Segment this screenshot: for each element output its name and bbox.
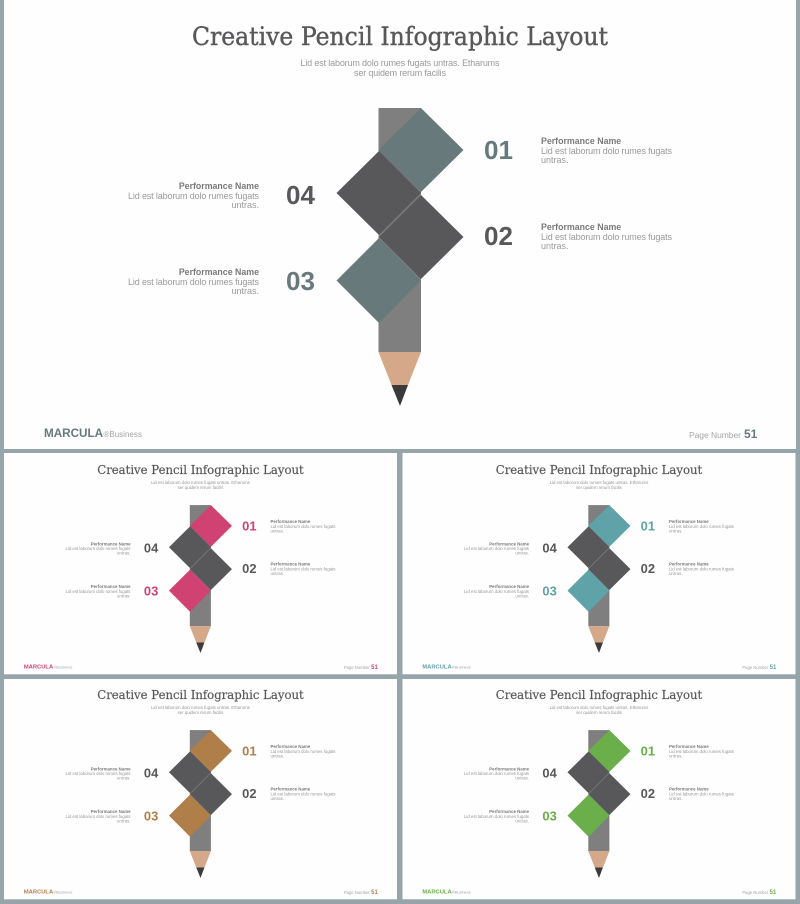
title: Creative Pencil Infographic Layout bbox=[97, 462, 304, 477]
item 03 bbox=[128, 266, 315, 296]
item 03: 03 bbox=[144, 808, 158, 823]
item 04: Lid est laborum dolo rumes fugats bbox=[464, 771, 530, 776]
brand footer: MARCULA bbox=[422, 664, 452, 670]
item 02: Performance Name bbox=[669, 562, 709, 567]
panel: green slide bbox=[402, 679, 795, 899]
pencil diagram bbox=[567, 730, 630, 878]
item 04: untras. bbox=[117, 776, 131, 781]
subtitle: Lid est laborum dolo rumes fugats untras. Etharums bbox=[151, 480, 251, 485]
page number: Page Number bbox=[344, 665, 370, 670]
item 01: Performance Name bbox=[541, 136, 621, 146]
subtitle bbox=[151, 480, 251, 490]
item 01 bbox=[242, 743, 336, 758]
subtitle: ser quidem rerum facilis bbox=[178, 710, 224, 715]
item 02: Performance Name bbox=[270, 562, 311, 567]
item 02: Lid est laborum dolo rumes fugats bbox=[270, 567, 336, 572]
item 03 bbox=[464, 583, 557, 598]
item 02 bbox=[242, 561, 336, 576]
page number: 51 bbox=[371, 665, 378, 671]
item 01 bbox=[641, 743, 735, 758]
item 01: Lid est laborum dolo rumes fugats bbox=[270, 524, 336, 529]
item 04: Performance Name bbox=[489, 541, 530, 546]
brand footer bbox=[24, 664, 72, 670]
page number: Page Number bbox=[344, 890, 370, 895]
item 02: 02 bbox=[641, 561, 655, 576]
item 01: untras. bbox=[669, 753, 683, 758]
page number: 51 bbox=[744, 427, 758, 441]
item 02 bbox=[641, 786, 735, 801]
subtitle: ser quidem rerum facilis bbox=[576, 710, 623, 715]
item 04: untras. bbox=[231, 200, 259, 210]
item 04: 04 bbox=[542, 766, 558, 781]
item 04: Performance Name bbox=[91, 766, 131, 771]
item 04 bbox=[128, 180, 315, 210]
item 02: 02 bbox=[484, 221, 513, 251]
item 02: Lid est laborum dolo rumes fugats bbox=[669, 792, 735, 797]
subtitle: ser quidem rerum facilis bbox=[178, 485, 224, 490]
item 03: 03 bbox=[542, 583, 557, 598]
item 02: 02 bbox=[641, 786, 655, 801]
item 01: 01 bbox=[484, 135, 513, 165]
item 01: 01 bbox=[641, 743, 655, 758]
item 01 bbox=[242, 518, 336, 533]
item 03 bbox=[66, 808, 158, 823]
pencil diagram bbox=[169, 730, 232, 878]
item 02 bbox=[242, 786, 336, 801]
item 03: Performance Name bbox=[179, 267, 259, 277]
subtitle: Lid est laborum dolo rumes fugats untras. Etharums bbox=[300, 58, 500, 68]
item 03: untras. bbox=[515, 593, 529, 598]
brand footer bbox=[422, 664, 471, 670]
panel: pink slide bbox=[4, 453, 397, 674]
item 04: Lid est laborum dolo rumes fugats bbox=[128, 191, 260, 201]
panel: brown slide bbox=[4, 679, 397, 899]
subtitle: Lid est laborum dolo rumes fugats untras. Etharums bbox=[151, 705, 251, 710]
item 01: Lid est laborum dolo rumes fugats bbox=[270, 749, 336, 754]
item 02: untras. bbox=[270, 571, 284, 576]
panel: teal slide bbox=[402, 453, 795, 674]
item 03: 03 bbox=[144, 583, 158, 598]
item 02: 02 bbox=[242, 786, 257, 801]
item 04 bbox=[464, 766, 558, 781]
subtitle bbox=[550, 480, 649, 490]
item 01 bbox=[641, 518, 735, 533]
item 04 bbox=[464, 541, 558, 556]
item 03 bbox=[66, 583, 158, 598]
item 03: untras. bbox=[117, 818, 131, 823]
item 01: Performance Name bbox=[669, 519, 709, 524]
subtitle bbox=[550, 705, 649, 715]
subtitle bbox=[300, 58, 500, 78]
item 03: 03 bbox=[286, 266, 315, 296]
page number bbox=[689, 427, 758, 441]
item 04: 04 bbox=[542, 541, 558, 556]
item 04: Performance Name bbox=[91, 541, 131, 546]
item 01: Lid est laborum dolo rumes fugats bbox=[541, 146, 672, 156]
item 01: untras. bbox=[270, 753, 284, 758]
subtitle: Lid est laborum dolo rumes fugats untras. Etharums bbox=[550, 480, 649, 485]
item 01: Performance Name bbox=[270, 744, 311, 749]
item 04: Performance Name bbox=[179, 181, 259, 191]
panel: main slate slide bbox=[4, 0, 796, 449]
brand footer bbox=[24, 889, 72, 895]
pencil diagram bbox=[567, 505, 630, 653]
item 04 bbox=[66, 541, 159, 556]
item 04: untras. bbox=[117, 551, 131, 556]
item 04: Lid est laborum dolo rumes fugats bbox=[66, 771, 131, 776]
title: Creative Pencil Infographic Layout bbox=[496, 462, 702, 477]
item 01 bbox=[484, 135, 672, 165]
item 01: Lid est laborum dolo rumes fugats bbox=[669, 749, 735, 754]
item 04: Lid est laborum dolo rumes fugats bbox=[464, 546, 530, 551]
title: Creative Pencil Infographic Layout bbox=[496, 687, 702, 702]
item 02: untras. bbox=[669, 796, 683, 801]
page number bbox=[344, 665, 378, 671]
title: Creative Pencil Infographic Layout bbox=[97, 687, 304, 702]
item 01: 01 bbox=[242, 743, 257, 758]
item 03 bbox=[464, 808, 557, 823]
item 04: untras. bbox=[515, 776, 529, 781]
item 03: Performance Name bbox=[489, 809, 530, 814]
item 04: 04 bbox=[144, 766, 159, 781]
item 03: Lid est laborum dolo rumes fugats bbox=[128, 277, 260, 287]
brand footer: MARCULA bbox=[24, 664, 54, 670]
item 04: 04 bbox=[286, 180, 315, 210]
item 03: Lid est laborum dolo rumes fugats bbox=[464, 814, 530, 819]
brand footer: ®Business bbox=[104, 430, 142, 439]
item 03: Performance Name bbox=[489, 584, 530, 589]
brand footer: ®Business bbox=[53, 664, 72, 669]
brand footer: ®Business bbox=[452, 889, 471, 894]
item 01: 01 bbox=[641, 518, 655, 533]
item 04: untras. bbox=[515, 551, 529, 556]
page number: 51 bbox=[770, 890, 777, 896]
item 02: Lid est laborum dolo rumes fugats bbox=[270, 792, 336, 797]
page number: Page Number bbox=[742, 665, 769, 670]
pencil diagram bbox=[169, 505, 232, 653]
item 03: Performance Name bbox=[91, 809, 131, 814]
item 01: untras. bbox=[270, 528, 284, 533]
item 01: Lid est laborum dolo rumes fugats bbox=[669, 524, 735, 529]
subtitle bbox=[151, 705, 251, 715]
item 03: Lid est laborum dolo rumes fugats bbox=[464, 589, 530, 594]
item 04: 04 bbox=[144, 541, 159, 556]
item 01: Performance Name bbox=[669, 744, 709, 749]
item 03: Lid est laborum dolo rumes fugats bbox=[66, 814, 131, 819]
brand footer: MARCULA bbox=[422, 889, 452, 895]
page number bbox=[742, 665, 777, 671]
item 02: Performance Name bbox=[541, 222, 621, 232]
item 03: Performance Name bbox=[91, 584, 131, 589]
item 02: Lid est laborum dolo rumes fugats bbox=[669, 567, 735, 572]
subtitle: Lid est laborum dolo rumes fugats untras. Etharums bbox=[550, 705, 649, 710]
item 03: untras. bbox=[515, 818, 529, 823]
brand footer: MARCULA bbox=[24, 889, 54, 895]
brand footer bbox=[422, 889, 471, 895]
item 02: untras. bbox=[669, 571, 683, 576]
item 04: Lid est laborum dolo rumes fugats bbox=[66, 546, 131, 551]
item 01: 01 bbox=[242, 518, 257, 533]
item 01: Performance Name bbox=[270, 519, 311, 524]
page number: Page Number bbox=[742, 890, 769, 895]
item 02 bbox=[484, 221, 672, 251]
page number: 51 bbox=[770, 665, 777, 671]
item 04: Performance Name bbox=[489, 766, 530, 771]
subtitle: ser quidem rerum facilis bbox=[576, 485, 623, 490]
item 02: Performance Name bbox=[669, 787, 709, 792]
item 04 bbox=[66, 766, 159, 781]
brand footer bbox=[44, 427, 142, 440]
item 02: untras. bbox=[541, 241, 569, 251]
brand footer: ®Business bbox=[452, 664, 471, 669]
item 01: untras. bbox=[541, 155, 569, 165]
page number: Page Number bbox=[689, 430, 741, 440]
brand footer: MARCULA bbox=[44, 427, 104, 440]
item 03: untras. bbox=[117, 593, 131, 598]
subtitle: ser quidem rerum facilis bbox=[354, 68, 446, 78]
item 03: Lid est laborum dolo rumes fugats bbox=[66, 589, 131, 594]
title: Creative Pencil Infographic Layout bbox=[192, 22, 608, 51]
item 02 bbox=[641, 561, 735, 576]
item 02: Lid est laborum dolo rumes fugats bbox=[541, 232, 672, 242]
page number: 51 bbox=[371, 890, 378, 896]
item 01: untras. bbox=[669, 528, 683, 533]
page number bbox=[344, 890, 378, 896]
item 02: untras. bbox=[270, 796, 284, 801]
item 02: Performance Name bbox=[270, 787, 311, 792]
page number bbox=[742, 890, 777, 896]
item 03: 03 bbox=[542, 808, 557, 823]
brand footer: ®Business bbox=[53, 889, 72, 894]
pencil diagram bbox=[336, 108, 464, 406]
item 03: untras. bbox=[231, 286, 259, 296]
item 02: 02 bbox=[242, 561, 257, 576]
